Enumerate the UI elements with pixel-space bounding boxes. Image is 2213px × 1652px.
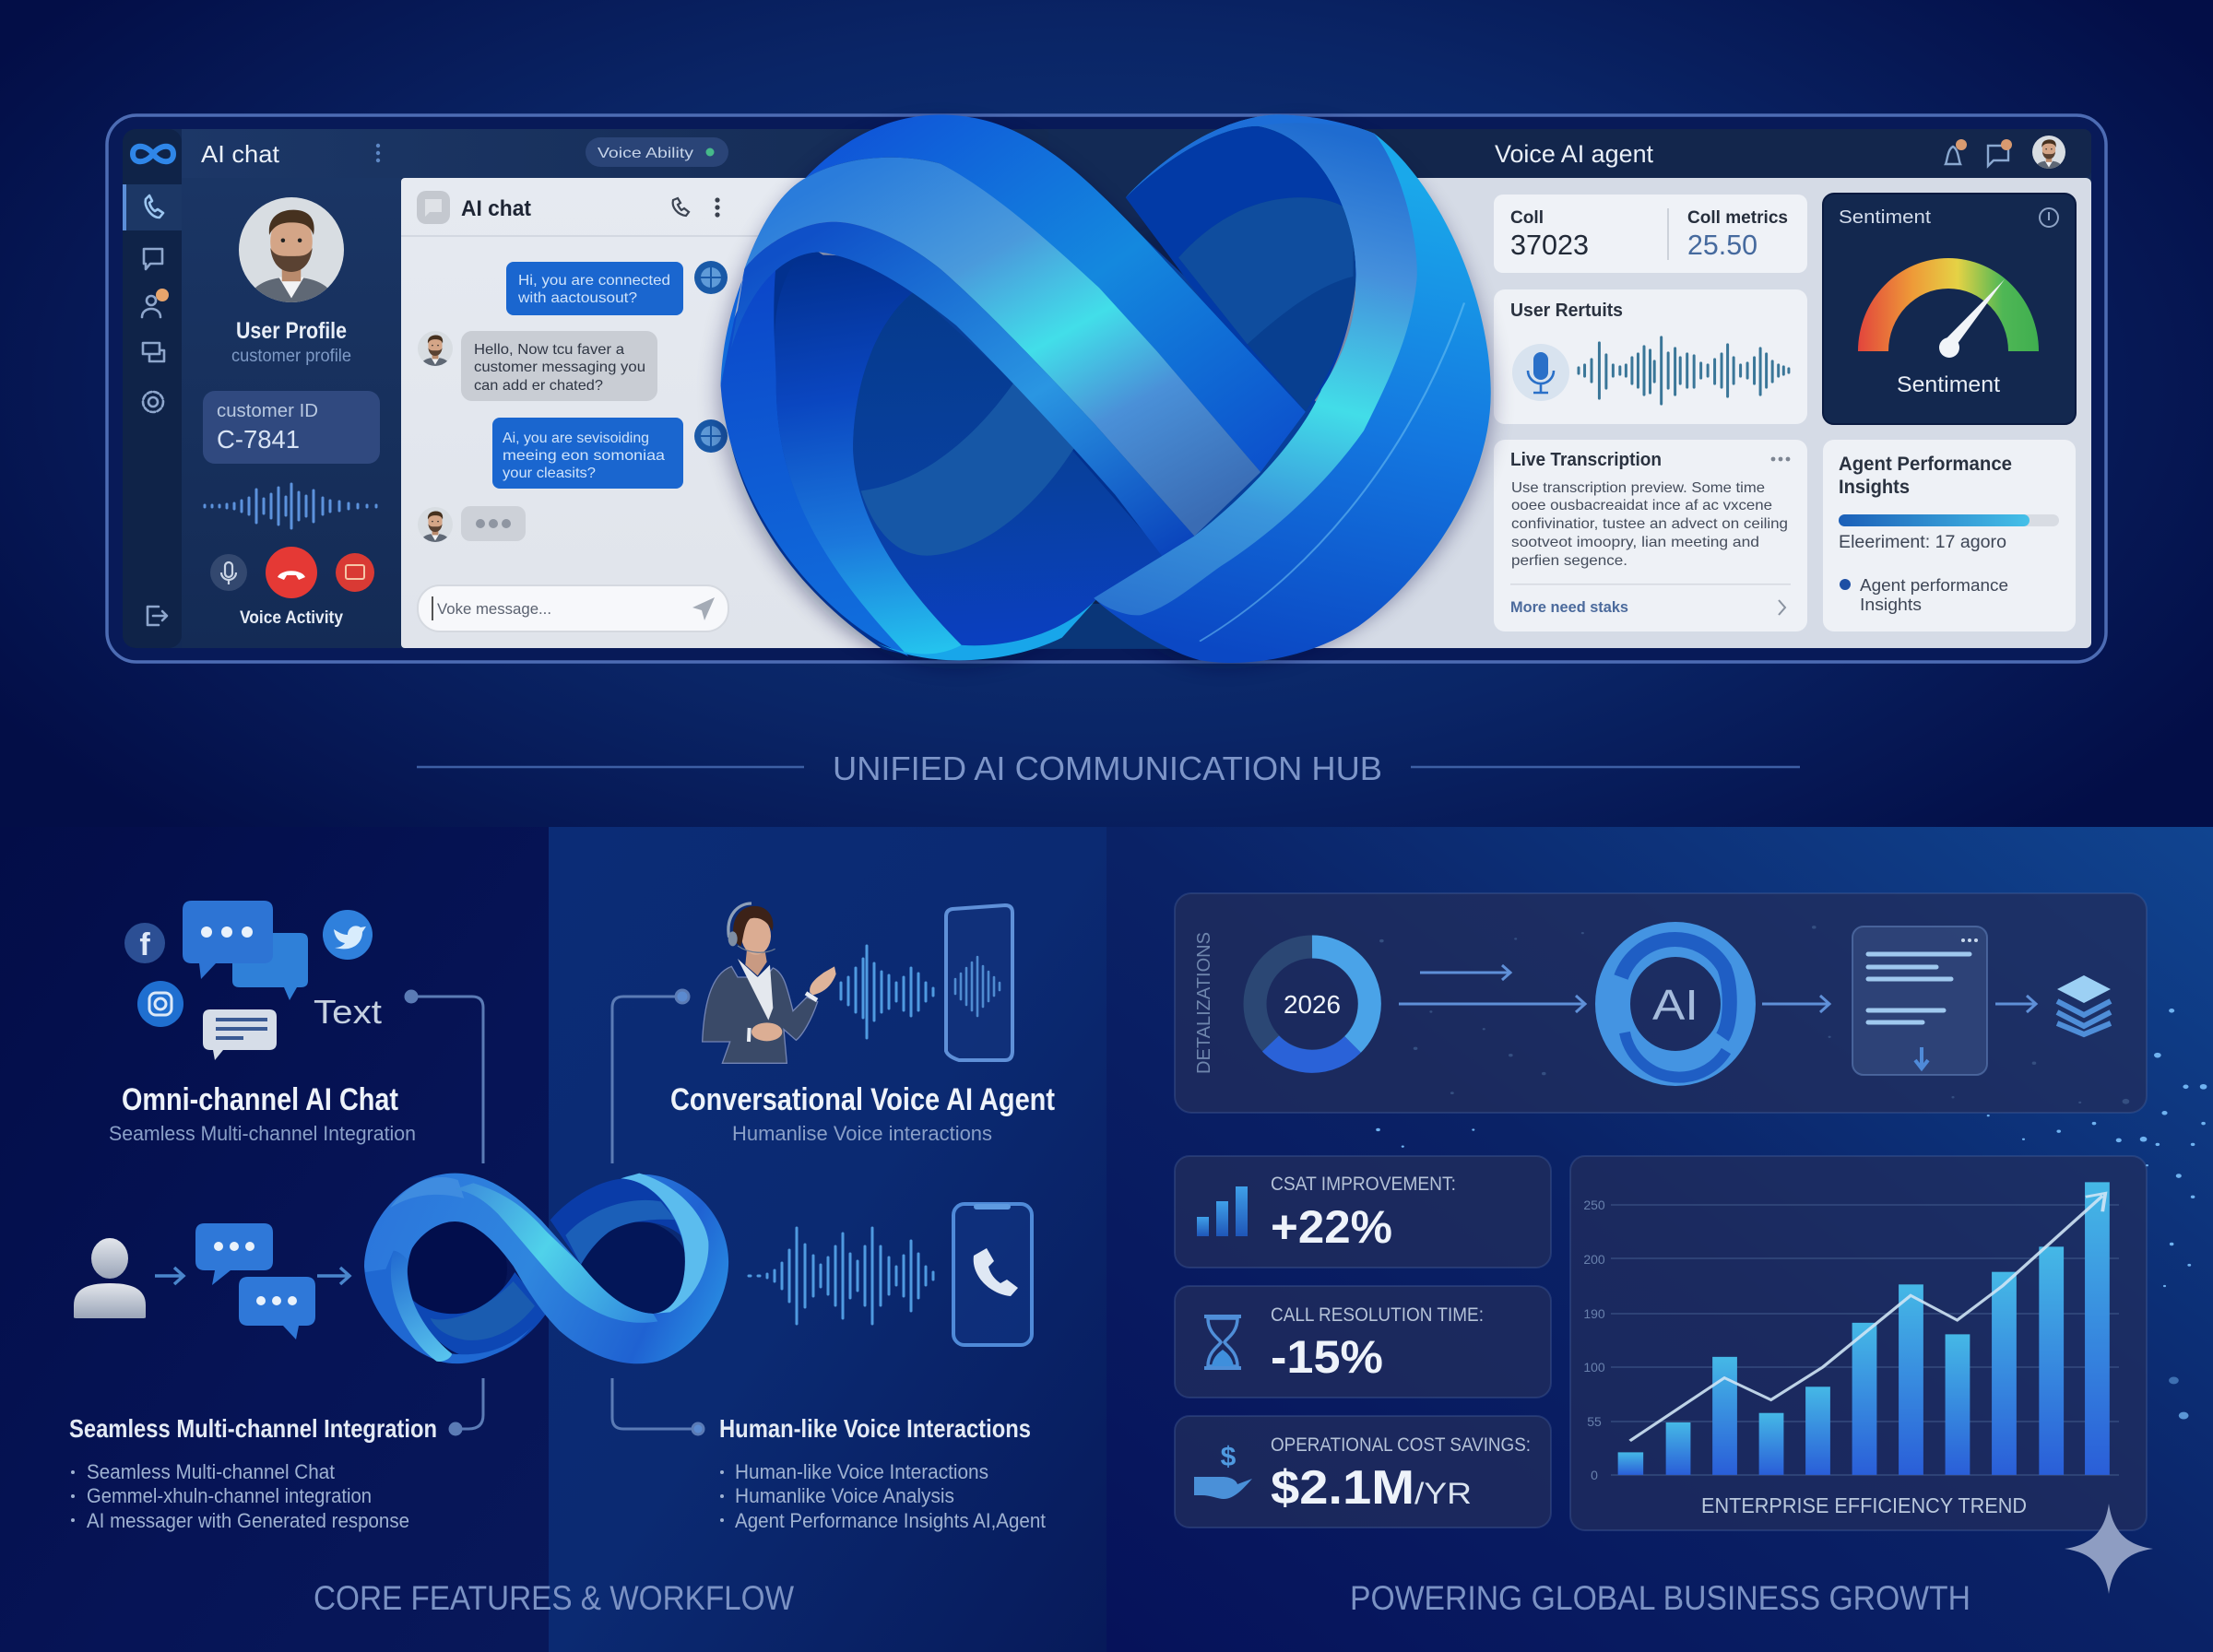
feature list left: Gemmel-xhuln-channel integration [87,1484,372,1507]
section title: unified hub: UNIFIED AI COMMUNICATION HUB [833,749,1382,787]
right ring light strip [1094,123,1417,615]
user profile text: User Profile [236,318,347,344]
y axis labels: 55 [1587,1414,1602,1429]
header title: AI chat: AI chat [201,140,280,168]
voice waveform [749,1228,933,1324]
card: agent performance: Agent Performance [1839,454,2012,475]
chat header [417,191,720,224]
card: sentiment gauge: Sentiment [1897,372,2000,397]
feature list left: Seamless Multi-channel Chat [87,1460,335,1483]
voice waveform [205,484,376,528]
user profile text: customer profile [231,347,351,366]
panel: unified hub dashboard window [107,115,2106,662]
heading: human-like voice interactions: Human-like Voice Interactions [719,1414,1031,1443]
arrows [1399,965,2036,1012]
heading: seamless multi-channel integration [69,1414,437,1532]
right ring outer strip [1094,114,1491,663]
section title: core features: CORE FEATURES & WORKFLOW [314,1579,794,1617]
card: call metrics: Coll metrics [1687,208,1788,228]
header icons [1946,136,2065,169]
right light panel [1291,178,2091,648]
card: live transcription: Use transcription preview. Some time [1511,480,1765,496]
text label: Text: Text [314,993,382,1031]
icon: hand with dollar: $ [1221,1442,1237,1472]
notch backing [956,604,1273,649]
card: call metrics: 37023 [1510,229,1589,261]
y axis labels: 100 [1583,1360,1605,1375]
chart: enterprise efficiency trend [1570,1156,2147,1530]
icon: omni-channel cluster: f [139,927,150,962]
main diagonal light strip [744,158,1260,536]
card: agent performance: Agent performance [1860,576,2008,595]
small infinity ribbon [364,1174,728,1363]
voice waveform and tilted phone [841,905,1012,1060]
card: agent performance: Insights [1839,477,1910,498]
icon: sparkle star [2065,1504,2153,1594]
KPI: CSAT improvement: CSAT IMPROVEMENT: [1271,1174,1456,1195]
hero infinity ribbon [721,114,1491,669]
KPI: operational cost savings: $2.1M [1271,1461,1414,1515]
message input: Voke message... [437,600,551,618]
voice activity label: Voice Activity [240,608,343,628]
feature list right: Humanlike Voice Analysis [735,1484,954,1507]
main strand [364,1174,728,1363]
feature list right: Agent Performance Insights AI,Agent [735,1509,1046,1532]
customer id card: C-7841 [217,425,300,454]
KPI: call resolution time [1175,1286,1551,1398]
message: agent bubble 1: Hi, you are connected [518,273,670,289]
heading: omni-channel AI chat: Seamless Multi-channel Integration [109,1122,416,1145]
message input [418,585,728,631]
left lobe [364,1223,535,1363]
avatar 2 [418,507,453,542]
y axis labels: 190 [1583,1306,1605,1321]
card: call metrics: 25.50 [1687,229,1757,261]
icon: menu dots [376,144,380,162]
feature list left: AI messager with Generated response [87,1509,409,1532]
holes [403,1220,507,1318]
y axis labels [1583,1198,1605,1482]
customer id card [203,391,380,464]
donut: 2026: 2026 [1284,990,1341,1019]
message: user bubble: Hello, Now tcu faver a [474,342,624,358]
message: agent bubble 2: meeing eon somoniaa [503,448,665,464]
icon: hourglass [1204,1316,1241,1368]
AI ring: AI [1652,981,1698,1029]
y axis labels: 250 [1583,1198,1605,1212]
message: agent bubble 1: with aactousout? [517,290,637,306]
card: live transcription: Live Transcription [1510,450,1662,470]
card: live transcription: ooee ousbacreaidat ince af ac vxcene [1511,498,1772,513]
donut: 2026 [1255,947,1369,1061]
KPI: operational cost savings: OPERATIONAL COST SAVINGS: [1271,1434,1531,1456]
card: live transcription [1494,440,1807,631]
left window chrome [123,129,2091,648]
message: agent bubble 2: Ai, you are sevisoiding [503,431,649,446]
feature list right: Human-like Voice Interactions [735,1460,988,1483]
icon: omni-channel cluster [124,901,373,1060]
card: sentiment gauge: Sentiment [1839,207,1931,228]
heading: omni-channel AI chat: Omni-channel AI Chat [122,1082,398,1117]
y axis labels: 200 [1583,1252,1605,1267]
sidebar icons [142,195,167,625]
typing indicator [461,506,526,541]
main diagonal top strip [721,114,1306,472]
heading: omni-channel AI chat [109,1082,416,1145]
icon: user to chat workflow [74,1223,349,1339]
user avatar [239,197,344,302]
panel: AI chat [401,178,1047,648]
back strands [408,1272,547,1358]
card: user results: User Rertuits [1510,301,1623,321]
y axis labels: 0 [1591,1468,1598,1482]
light band [455,1183,657,1323]
message: agent bubble 1 [506,262,683,315]
ribbon highlight line [1200,302,1464,642]
KPI: call resolution time: -15% [1271,1331,1383,1383]
message: agent bubble 2 [492,418,683,489]
KPI: CSAT improvement: +22% [1271,1201,1392,1253]
gauge arc [1858,258,2039,351]
document card [1852,926,1987,1075]
card: call metrics: Coll [1510,208,1544,228]
icon: layers [2057,975,2111,1034]
AI ring [1613,939,1738,1078]
feature list left [71,1460,409,1532]
card: live transcription: More need staks [1510,598,1628,616]
message: agent bubble 2: your cleasits? [503,466,596,481]
heading: conversational voice AI agent [670,1082,1055,1145]
right hole [1126,126,1356,412]
icon: phone with handset [953,1204,1032,1345]
card: call metrics [1494,195,1807,273]
header title: Voice AI agent: Voice AI agent [1495,140,1653,168]
icon: globe 2 [694,419,728,453]
KPI: operational cost savings: /YR [1414,1477,1472,1510]
card: live transcription: sootveot imoopry, lian meeting and [1511,535,1759,550]
icon: bars [1197,1186,1248,1236]
card: live transcription: perfien segence. [1511,553,1627,569]
message: user bubble [461,331,657,401]
heading: conversational voice AI agent: Humanlise Voice interactions [732,1122,992,1145]
panel: core features and workflow [69,901,1055,1617]
left hole [723,252,1194,657]
ribbon glow [721,120,1491,669]
chat header: AI chat [461,196,531,221]
card: user results [1494,289,1807,424]
avatar [418,331,453,366]
icon: microphone [1512,344,1569,401]
panel: business growth [1175,893,2207,1617]
card: sentiment gauge [1823,194,2076,424]
connector lines [406,990,704,1434]
left ring lower strips [775,255,962,655]
voice ability pill [586,137,728,167]
gauge needle [1939,279,2005,358]
voice ability pill: Voice Ability [598,146,693,161]
card: live transcription: confivinatior, tustee an advect on ceiling [1511,516,1788,532]
feature list right [720,1460,1046,1532]
call controls [210,547,374,598]
section title: business growth: POWERING GLOBAL BUSINESS GROWTH [1350,1579,1970,1617]
panel: process flow [1175,893,2147,1113]
ribbon core backing [850,235,1327,619]
KPI: operational cost savings [1175,1416,1551,1528]
message: user bubble: customer messaging you [474,360,645,375]
heading: human-like voice interactions [719,1414,1046,1532]
particles [1376,926,2207,1420]
heading: conversational voice AI agent: Conversational Voice AI Agent [670,1082,1055,1117]
icon: globe [694,261,728,294]
KPI: call resolution time: CALL RESOLUTION TIME: [1271,1304,1484,1326]
card: agent performance [1823,440,2076,631]
waveform [1579,337,1789,404]
card: agent performance: Insights [1860,596,1922,614]
trend line [1630,1193,2105,1441]
KPI: CSAT improvement [1175,1156,1551,1268]
card: agent performance: Eleeriment: 17 agoro [1839,533,2006,552]
customer id card: customer ID [217,401,318,421]
icon: hand with dollar [1194,1442,1252,1499]
vertical label: DETALIZATIONS [1194,932,1214,1074]
chart: enterprise efficiency trend: ENTERPRISE EFFICIENCY TREND [1701,1493,2027,1517]
main diagonal lower strip [731,222,1194,557]
bars [1618,1182,2110,1475]
heading: seamless multi-channel integration: Seamless Multi-channel Integration [69,1414,437,1443]
icon: notification dot [156,289,169,301]
icon: app logo [133,147,173,161]
icon: customer service agent [703,903,836,1063]
message: user bubble: can add er chated? [474,378,603,394]
right ring top edge [1126,114,1374,197]
user profile text [231,318,351,366]
